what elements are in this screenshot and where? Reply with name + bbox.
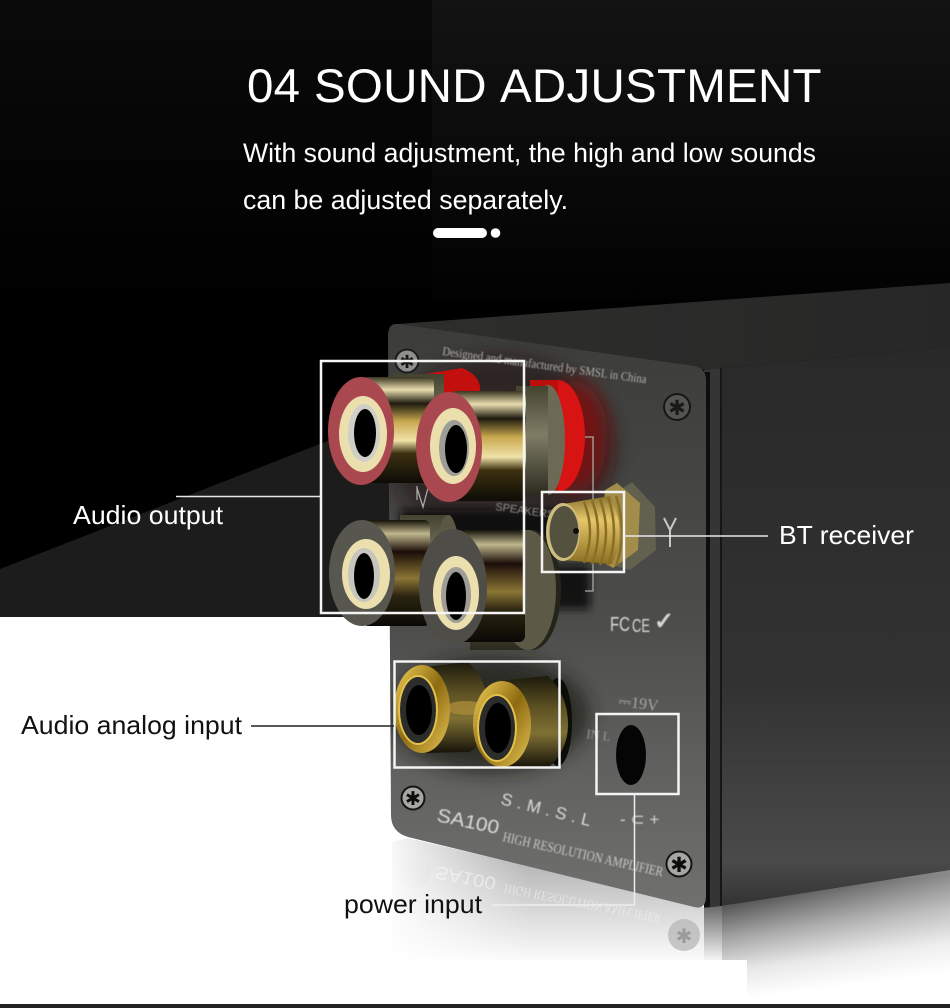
amplifier reflection: ✱ [676, 926, 692, 948]
leader line: audio output [176, 496, 321, 498]
screw: bottom right [666, 850, 692, 878]
decorative pill indicator [433, 228, 500, 238]
plate lettering: ⎓19V [618, 693, 660, 715]
bracket marks on plate [417, 437, 593, 591]
plate lettering: FC [610, 614, 630, 636]
callout box: audio analog input [394, 662, 560, 768]
binding post: lower left [329, 520, 430, 626]
top panel [388, 283, 950, 370]
upper binding post bases: red collars [392, 368, 585, 495]
leader line: power input [492, 794, 634, 905]
plate lettering: ✓ [654, 608, 674, 635]
front plate [388, 324, 706, 908]
screw: bottom left: ✱ [405, 789, 421, 810]
background: white lower area [0, 617, 950, 1004]
plate lettering: S.M.S.L [499, 789, 593, 830]
plate lettering: SA100 [435, 805, 501, 839]
amplifier reflection: HIGH RESOLUTION AMPLIFIER [503, 881, 663, 926]
screw: top right: ✱ [668, 397, 686, 420]
plate lettering: SPEAKERS [495, 501, 555, 521]
plate lettering: Designed and manufactured by SMSL in China [442, 344, 648, 386]
antenna connector [546, 482, 656, 570]
icon: antenna mark [664, 518, 676, 547]
plate lettering: IN L [586, 726, 611, 744]
binding post: upper right [416, 391, 526, 502]
screws [394, 348, 692, 878]
plate lettering: HIGH RESOLUTION AMPLIFIER [501, 830, 665, 881]
leader line: BT receiver [624, 535, 768, 537]
screw: bottom left [400, 786, 426, 810]
screw: top left: ✱ [399, 352, 415, 372]
plate lettering: CE [632, 616, 650, 636]
socket shadows clipped to plate [385, 355, 615, 773]
RCA input sockets [394, 662, 572, 768]
title: 04 [247, 60, 300, 113]
screw: bottom right: ✱ [670, 854, 688, 877]
description text: With sound adjustment, the high and low sounds [243, 138, 816, 168]
label: power input: power input [344, 889, 483, 919]
callout box: audio output [321, 361, 524, 613]
corner rim [704, 368, 722, 908]
callout box: BT receiver [542, 492, 624, 572]
screw: top left [394, 348, 420, 374]
description text [243, 138, 816, 215]
bottom strip [0, 1004, 950, 1008]
label: BT receiver: BT receiver [779, 520, 914, 550]
title: SOUND [314, 60, 487, 113]
binding post: lower right [419, 529, 525, 645]
binding post: upper left [328, 377, 434, 485]
screw: top right [663, 393, 691, 421]
callout box: power input [596, 714, 678, 794]
side panel [722, 347, 950, 906]
background: dark upper area [0, 0, 950, 617]
RCA: left [394, 662, 488, 753]
label: audio analog input: Audio analog input [21, 710, 243, 740]
power socket [616, 725, 646, 785]
description text: can be adjusted separately. [243, 185, 568, 215]
title: ADJUSTMENT [500, 60, 822, 113]
plate lettering [435, 344, 674, 881]
amplifier reflection: SA100 [433, 862, 498, 894]
lower binding post bases [400, 515, 561, 650]
plate lettering: - ⊂ + [620, 810, 659, 829]
leader line: audio analog input [251, 725, 394, 727]
amplifier body [385, 283, 950, 908]
label: audio output: Audio output [73, 500, 224, 530]
RCA: right [473, 676, 572, 768]
amplifier reflection [0, 838, 950, 1004]
